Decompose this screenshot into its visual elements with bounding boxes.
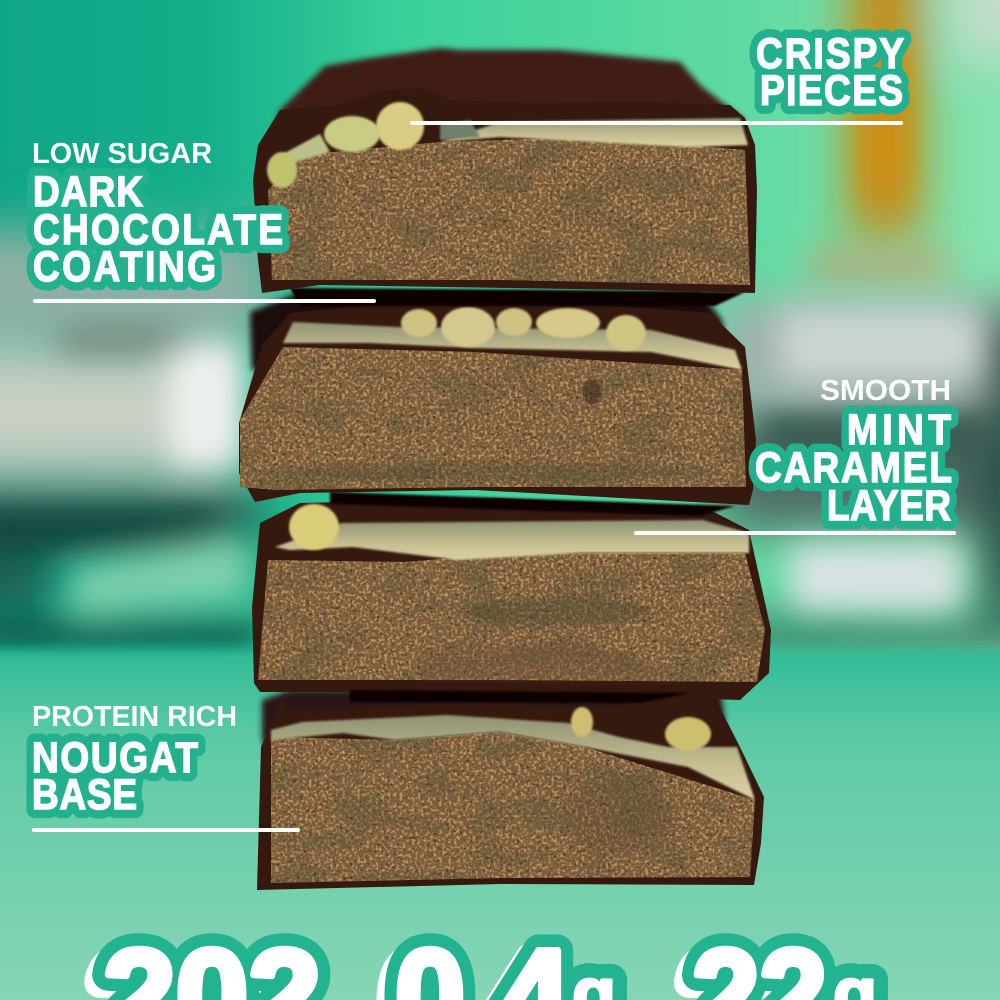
label: protein rich nougat base: NOUGAT [32,735,198,782]
label: crispy pieces: PIECES [760,68,903,115]
label: low sugar dark chocolate coating: CHOCOLATE [33,207,283,254]
label: smooth mint caramel layer: CARAMEL [755,445,952,492]
bar slice 2 [239,292,756,505]
leader line: mint caramel [634,531,956,535]
label: protein rich nougat base: BASE [32,772,137,819]
label: smooth mint caramel layer: SMOOTH [820,375,951,407]
label: protein rich nougat base [32,701,300,832]
label: protein rich nougat base: PROTEIN RICH [32,701,237,733]
leader line: dark chocolate [33,299,376,303]
bar slice 4: nougat base [257,688,764,890]
nutrition stats [94,922,877,1000]
label: smooth mint caramel layer: MINT [847,407,951,454]
label: smooth mint caramel layer: LAYER [827,483,951,530]
label: low sugar dark chocolate coating [32,138,376,303]
leader line: nougat [32,828,300,832]
label: protein rich nougat base: NOUGAT [32,735,198,782]
label: smooth mint caramel layer: MINT [847,407,951,454]
label: low sugar dark chocolate coating: CHOCOLATE [33,207,283,254]
label: low sugar dark chocolate coating: DARK [33,169,143,216]
label: crispy pieces: PIECES [760,68,903,115]
label: protein rich nougat base: BASE [32,772,137,819]
label: smooth mint caramel layer: CARAMEL [755,445,952,492]
label: crispy pieces: CRISPY [756,31,904,78]
label: crispy pieces [410,31,904,125]
label: low sugar dark chocolate coating: LOW SUGAR [32,138,212,170]
bar slice 1: top [253,48,757,293]
label: low sugar dark chocolate coating: COATING [33,244,216,291]
label: crispy pieces: CRISPY [756,31,904,78]
label: low sugar dark chocolate coating: DARK [33,169,143,216]
bar slice 3: mint caramel [252,498,771,700]
label: smooth mint caramel layer [634,375,956,535]
label: low sugar dark chocolate coating: COATING [33,244,216,291]
leader line: crispy pieces [410,121,903,125]
label: smooth mint caramel layer: LAYER [827,483,951,530]
shadow gaps between slices [290,288,745,703]
